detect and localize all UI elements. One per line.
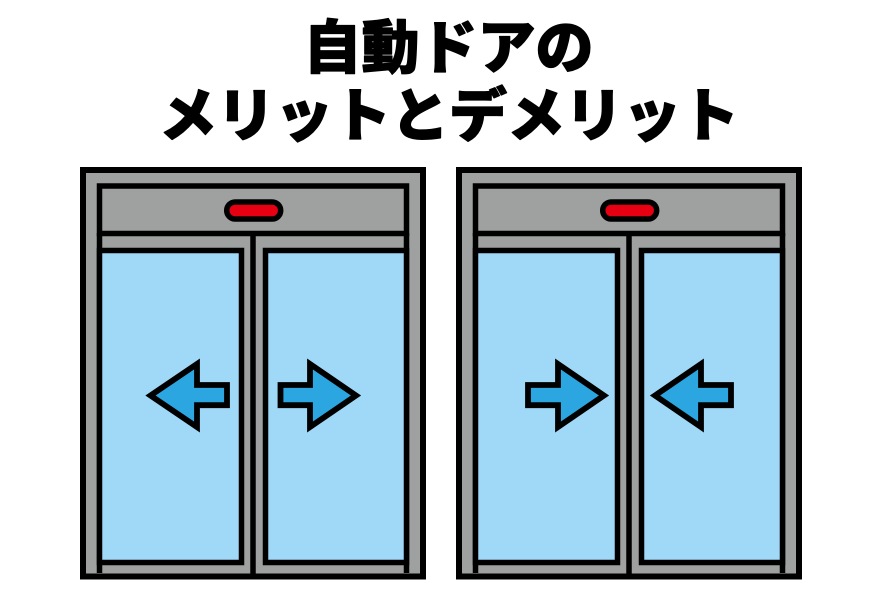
left glass panel bbox=[476, 250, 618, 562]
arrow: right, pointing inward bbox=[528, 364, 604, 427]
title: 自動ドアの bbox=[303, 16, 594, 81]
arrow: right bbox=[280, 364, 356, 427]
door frame bbox=[459, 170, 799, 576]
inner frame sides bbox=[476, 233, 782, 576]
right glass panel bbox=[642, 250, 782, 562]
left glass panel bbox=[100, 250, 242, 562]
title: メリットとデメリット bbox=[159, 84, 739, 149]
title bbox=[159, 16, 739, 149]
right glass panel bbox=[266, 250, 406, 562]
sensor light bbox=[603, 202, 657, 219]
panel: door closing bbox=[459, 170, 799, 576]
panel: door opening bbox=[83, 170, 423, 576]
arrow: left, pointing inward bbox=[655, 364, 731, 427]
sensor header bbox=[100, 186, 406, 234]
sensor header bbox=[476, 186, 782, 234]
arrow: left bbox=[150, 364, 227, 427]
sensor light bbox=[227, 202, 281, 219]
inner frame sides bbox=[100, 233, 406, 576]
door frame bbox=[83, 170, 423, 576]
